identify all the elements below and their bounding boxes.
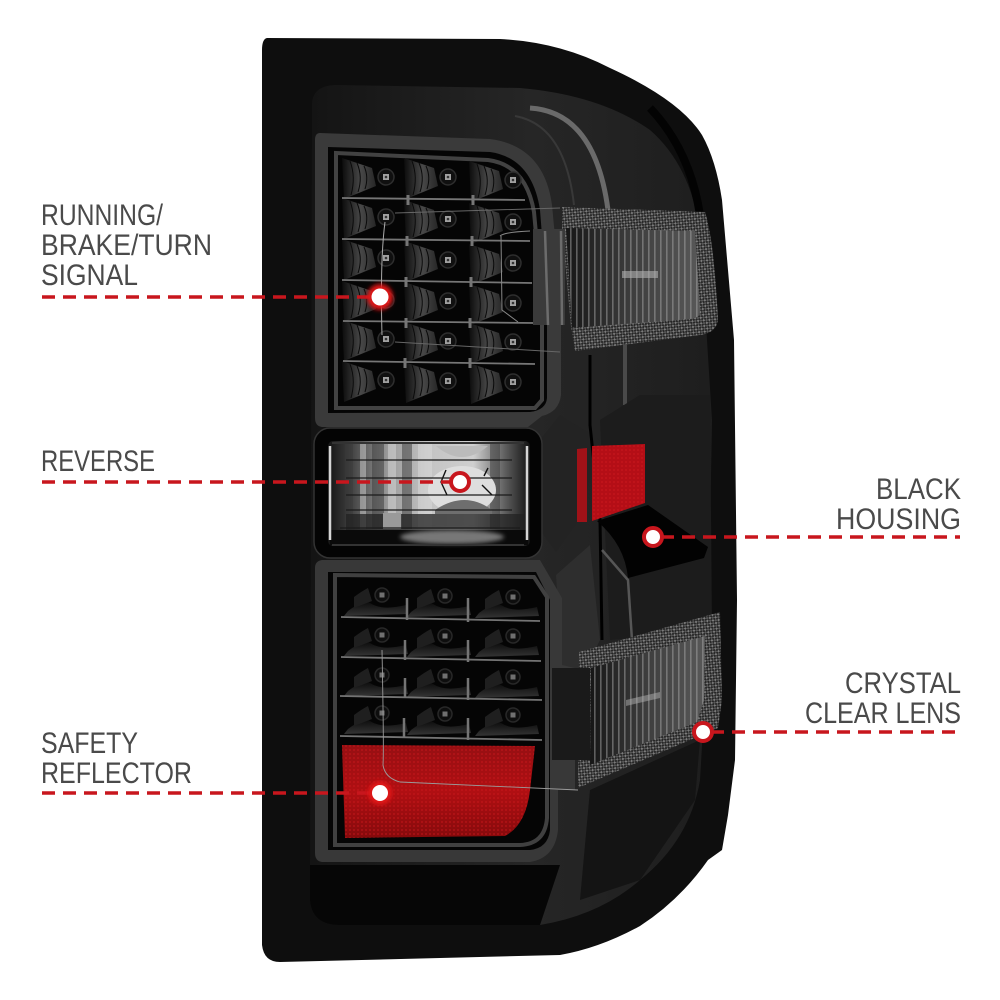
callout: safety reflector: REFLECTOR [41, 757, 192, 790]
LED cells, upper module [342, 158, 521, 404]
upper clear lens [533, 207, 718, 351]
reverse chrome edges [330, 446, 527, 540]
LED grid bars [342, 195, 560, 368]
module grey frame [315, 133, 561, 427]
reverse black surround [314, 428, 542, 558]
lower module recess [328, 572, 550, 850]
lower module grey frame [315, 560, 575, 862]
upper lens carbon band [562, 207, 718, 351]
module black recess [328, 147, 547, 413]
thin guide wire [382, 650, 578, 790]
callout: running/brake/turn signal: RUNNING/ [41, 199, 164, 232]
callout: running/brake/turn signal: BRAKE/TURN [41, 229, 212, 262]
callout: running/brake/turn signal: SIGNAL [41, 259, 138, 292]
callout: black housing: HOUSING [836, 503, 961, 536]
callout: reverse: REVERSE [41, 445, 155, 478]
callout: crystal clear lens [694, 667, 961, 741]
safety reflector [342, 745, 535, 838]
panel: running/brake/turn signal LED module [315, 133, 561, 427]
callout: crystal clear lens: CRYSTAL [845, 667, 961, 700]
module inner frame [336, 153, 542, 408]
lower lens ribs [590, 636, 705, 765]
panel: lower LED module [315, 560, 578, 862]
red side marker [577, 444, 645, 522]
lower module inner frame [335, 575, 547, 845]
upper lens glow [622, 271, 658, 278]
callout: crystal clear lens: CLEAR LENS [805, 697, 961, 730]
lower clear lens [552, 612, 722, 788]
upper lens stem [533, 229, 565, 325]
reverse lamp stripes [330, 443, 528, 545]
black housing silhouette [262, 38, 737, 962]
LED cells, lower module [344, 588, 539, 736]
callout: black housing: BLACK [876, 473, 961, 506]
upper lens ribs [566, 228, 700, 327]
lower grid bars [340, 598, 542, 740]
inner lens body [310, 85, 712, 925]
lower lens stem [552, 668, 590, 760]
lower lens glow [626, 692, 660, 706]
black housing pocket [597, 505, 708, 578]
callout: black housing [644, 473, 961, 546]
callout: safety reflector [41, 727, 392, 805]
callout: reverse [41, 445, 469, 491]
lower lens carbon band [578, 612, 722, 788]
reverse lamp interior [328, 441, 530, 546]
panel body highlights [310, 108, 712, 925]
callout: running/brake/turn signal [41, 199, 393, 310]
panel: reverse light [314, 428, 542, 558]
callout: safety reflector: SAFETY [41, 727, 138, 760]
